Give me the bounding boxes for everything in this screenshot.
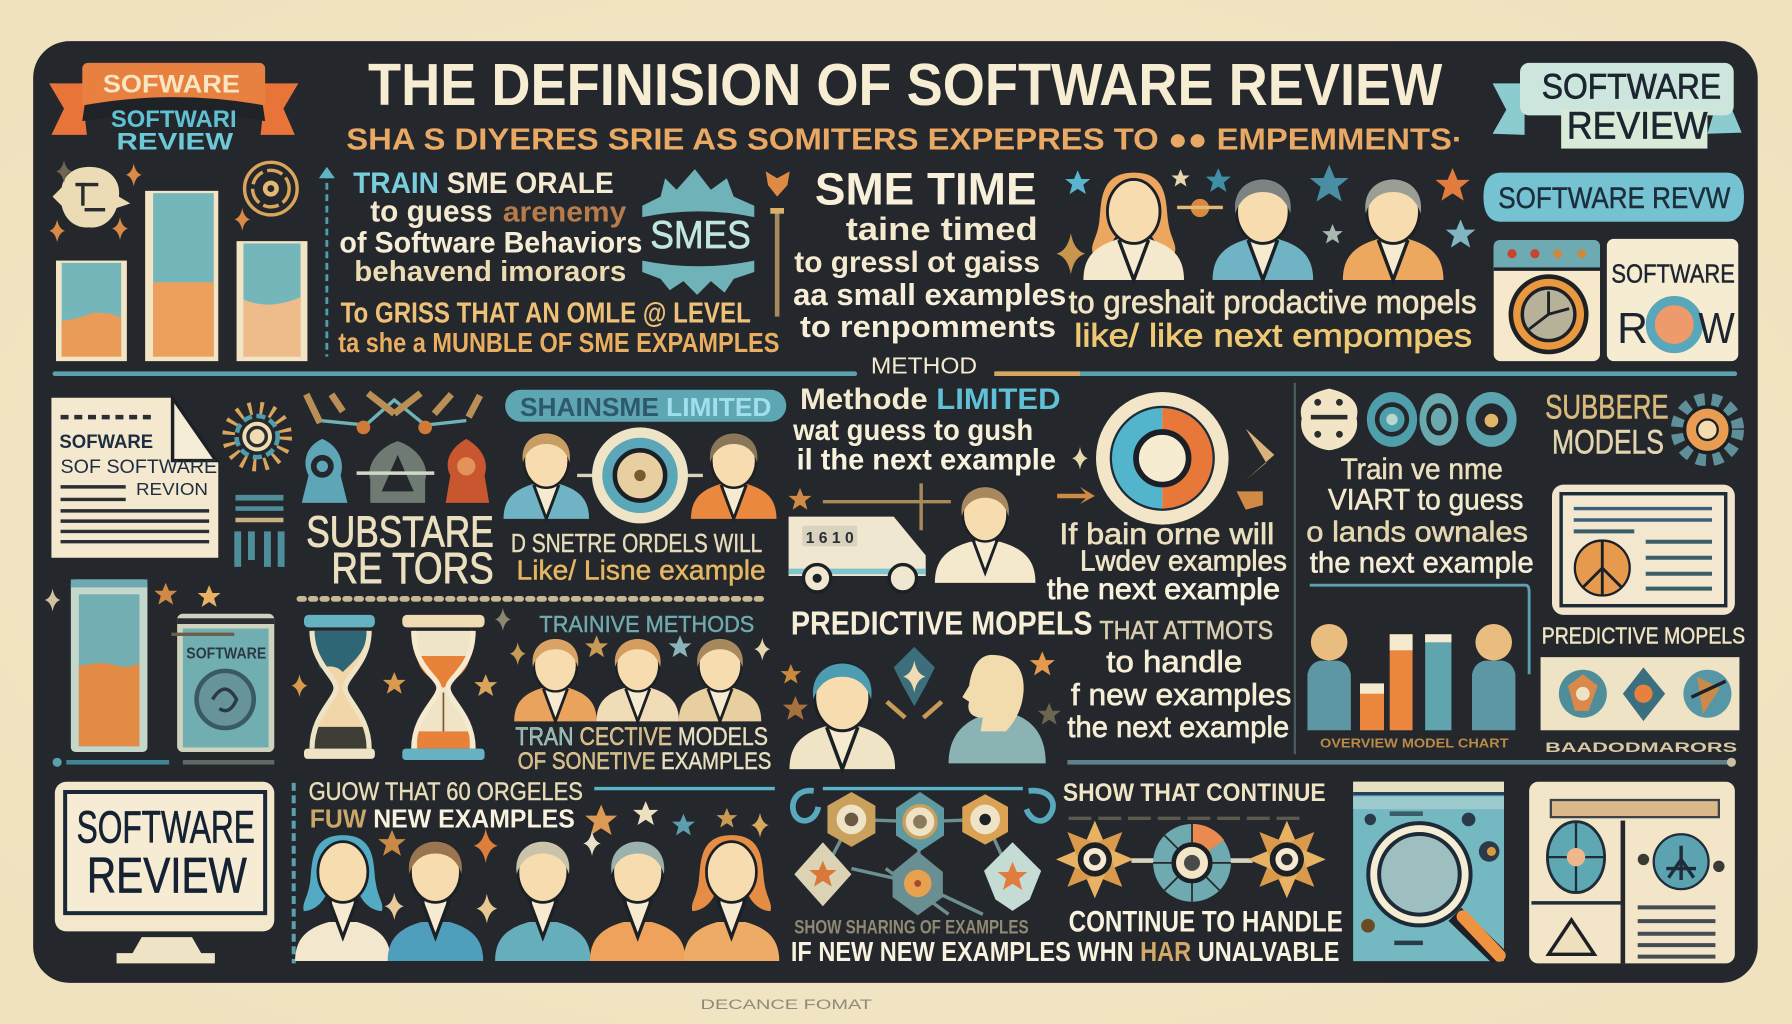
- text block: train sme: behavend imoraors: [354, 256, 626, 288]
- panel: monitor: [55, 782, 274, 963]
- panel: bar gauges: [49, 160, 307, 361]
- person 4: [590, 842, 685, 961]
- lines: [1638, 907, 1715, 957]
- text block: handle new examples: to handle: [1106, 644, 1242, 679]
- card: three emblems: [1541, 657, 1739, 730]
- people: three experts: [1056, 165, 1475, 280]
- badge: teal software review ribbon: [1493, 63, 1742, 149]
- heading: subbere models: SUBBERE: [1545, 388, 1669, 426]
- people: five team members: [295, 835, 779, 961]
- bar short: [1360, 683, 1384, 730]
- person 1: [514, 639, 597, 721]
- person: truck driver: [935, 487, 1035, 583]
- icon: smes gear badge: [642, 169, 754, 295]
- text block: if new examples: IF NEW NEW EXAMPLES WHN HAR UNALVABLE: [791, 936, 1339, 967]
- text block: sme time: aa small examples: [793, 277, 1066, 312]
- icon: tower: [235, 495, 283, 567]
- text block: sme time: taine timed: [846, 211, 1038, 247]
- bar tall teal: [1425, 634, 1451, 730]
- arrow: right chain: [1026, 791, 1053, 821]
- heading: substare retors: [306, 508, 494, 593]
- heading: trainive methods: TRAINIVE METHODS: [539, 611, 754, 637]
- text block: models will: D SNETRE ORDELS WILL: [511, 528, 762, 558]
- pill: software review: [1483, 173, 1744, 222]
- text block: train ve nme: VIART to guess: [1328, 484, 1523, 517]
- divider: method: [53, 353, 1737, 379]
- person right: [1472, 624, 1515, 730]
- icon: medals network: [302, 393, 489, 503]
- text block: train sme: of Software Behaviors: [339, 227, 642, 260]
- text block: predictive models top: [1069, 284, 1477, 353]
- text block: predictive models top: like/ like next empompes: [1074, 317, 1472, 353]
- node 1: [827, 792, 875, 847]
- icon: ring 2: [1419, 393, 1458, 446]
- text block: new examples: [309, 778, 583, 833]
- bar tall orange: [1390, 634, 1413, 730]
- footer credit: DECANCE FOMAT: [701, 997, 873, 1012]
- icon: software row card: R: [1617, 305, 1648, 353]
- node 6: [984, 842, 1041, 911]
- text block: will examples: [1047, 518, 1287, 606]
- person left: [504, 433, 589, 519]
- document text: [59, 417, 217, 542]
- badge: teal software review ribbon: REVIEW: [1567, 104, 1708, 146]
- text block: train sme: ta she a MUNBLE OF SME EXPAMPLES: [338, 327, 779, 358]
- text block: will examples: If bain orne will: [1059, 518, 1274, 551]
- icon: peace pie: [1575, 541, 1630, 595]
- caption: faded show line: SHOW SHARING OF EXAMPLES: [794, 917, 1029, 939]
- icon: central target: [577, 427, 703, 523]
- badge: orange software ribbon: SOFWARE: [103, 71, 240, 99]
- icon: window card: [1494, 240, 1600, 361]
- text block: train sme: arenemy: [503, 197, 626, 229]
- icon: magnifying glass: [1374, 829, 1499, 958]
- arrow: left chain: [793, 791, 818, 821]
- person left: [1307, 624, 1351, 730]
- icon: gold target: [245, 162, 297, 215]
- chart: donut: [1096, 392, 1229, 525]
- text block: train ve nme: Train ve nme: [1341, 453, 1503, 486]
- icon: folded corner: [173, 398, 216, 461]
- person 2: [388, 842, 483, 961]
- diagram: network of nodes: [793, 791, 1053, 915]
- icon: gold sun right: [1248, 821, 1326, 898]
- icon: ring 1: [1367, 392, 1417, 447]
- text block: trainive models: OF SONETIVE EXAMPLES: [518, 748, 771, 775]
- text block: methode limited: il the next example: [797, 444, 1056, 477]
- heading: substare retors: SUBSTARE: [306, 508, 494, 556]
- icon: software box: [177, 614, 274, 752]
- heading: substare retors: RE TORS: [331, 545, 494, 593]
- people: predictive pair: [781, 647, 1061, 769]
- rule: teal top line: [594, 787, 1023, 790]
- vertical rule: [1294, 383, 1296, 754]
- icon: badge: [53, 167, 130, 228]
- divider: method: METHOD: [871, 353, 977, 379]
- emblem 2: [1623, 667, 1665, 721]
- accents: small marks: [1361, 813, 1499, 943]
- text block: sme time: SME TIME: [815, 164, 1037, 215]
- text block: train sme: [338, 167, 779, 358]
- person 1: [1083, 173, 1184, 280]
- heading: predictive models: PREDICTIVE MOPELS: [791, 605, 1093, 642]
- person 2: [1213, 179, 1313, 280]
- icon: house: [1549, 920, 1594, 954]
- icon: ornament: [887, 647, 942, 718]
- icon: hourglass orange: [402, 615, 485, 760]
- monitor text: SOFTWARE: [77, 801, 255, 852]
- person 3: [495, 842, 591, 961]
- icon: flag pin: [766, 171, 790, 317]
- text block: will examples: the next example: [1047, 573, 1280, 606]
- text block: sme time: [793, 164, 1066, 344]
- document text: REVION: [136, 479, 208, 499]
- divider: lower: [53, 758, 1736, 767]
- badge: orange software ribbon: SOFTWARI: [111, 106, 237, 133]
- monitor screen: [65, 792, 265, 913]
- pill: software review: SOFTWARE REVW: [1498, 182, 1730, 215]
- heading: subbere models: [1545, 388, 1669, 462]
- icon: teal sun: [229, 408, 286, 465]
- node 2: [896, 792, 944, 851]
- text block: predictive models top: to greshait prodactive mopels: [1069, 284, 1477, 320]
- subtitle: SHA S DIYERES SRIE AS SOMITERS EXPEPRES TO ●● EMPEMMENTS·: [346, 122, 1463, 157]
- person 3: [1343, 179, 1443, 280]
- icon: software row card: [1607, 239, 1738, 361]
- icon: orange sun: [1678, 400, 1737, 459]
- node 3: [962, 794, 1008, 845]
- text block: train sme: TRAIN SME ORALE: [353, 167, 614, 200]
- node 4: [794, 842, 851, 906]
- text block: trainive models: TRAN CECTIVE MODELS: [515, 723, 768, 751]
- accents: stars row: [378, 801, 769, 923]
- accents: stars: [781, 651, 1061, 725]
- rule: dashed vertical: [292, 783, 295, 963]
- icon: software row card: SOFTWARE: [1611, 258, 1735, 288]
- text block: handle new examples: [1067, 615, 1291, 744]
- monitor text: [77, 801, 255, 904]
- emblem 1: [1559, 670, 1607, 718]
- accents: trainer stars: [510, 635, 770, 665]
- text block: train ve nme: o lands ownales: [1306, 517, 1528, 549]
- text block: train ve nme: [1306, 453, 1534, 580]
- accents: gold stars: [291, 608, 511, 697]
- icon: pie: [1547, 822, 1605, 893]
- person 5: [684, 835, 779, 961]
- text block: handle new examples: the next example: [1067, 711, 1289, 744]
- text block: show that continue: SHOW THAT CONTINUE: [1063, 779, 1326, 807]
- monitor text: REVIEW: [87, 847, 247, 904]
- text block: new examples: GUOW THAT 60 ORGELES: [309, 778, 583, 806]
- bracket line: [1310, 585, 1529, 674]
- title: THE DEFINISION OF SOFTWARE REVIEW: [368, 51, 1443, 118]
- person right: [691, 433, 776, 519]
- icon: document page: [51, 398, 218, 558]
- icon: gold sun left: [1056, 821, 1134, 898]
- text block: handle new examples: f new examples: [1071, 677, 1291, 712]
- icon: truck: [789, 517, 926, 592]
- header bar: [1551, 800, 1719, 817]
- arrow: vertical teal: [319, 167, 335, 357]
- accents: pointers: [789, 429, 1274, 530]
- text block: sme time: to renpomments: [800, 309, 1056, 344]
- icon: software row card: W: [1698, 305, 1735, 353]
- text block: models will: [511, 528, 766, 585]
- icon: jar: [71, 579, 147, 752]
- gauge bar 3: [237, 241, 307, 361]
- people: target pair: [504, 427, 776, 523]
- monitor stand: [117, 937, 215, 963]
- badge: orange software ribbon: [49, 63, 298, 156]
- card dividers: [1531, 901, 1621, 904]
- accents: small stars: [49, 160, 250, 242]
- panel: magnifier: [1353, 782, 1504, 961]
- icon: ring 3: [1466, 392, 1517, 447]
- text block: new examples: FUW NEW EXAMPLES: [310, 803, 575, 833]
- gauge bar 2: [145, 191, 218, 361]
- icon: hourglass teal: [304, 615, 375, 759]
- person 2: [596, 639, 679, 721]
- icon: smes gear badge: SMES: [650, 214, 751, 257]
- text block: models will: Like/ Lisne example: [517, 554, 766, 585]
- chart: people and bars: [1307, 585, 1529, 750]
- text block: methode limited: [792, 383, 1061, 477]
- text block: trainive models: [515, 723, 771, 775]
- text block: continue to handle: CONTINUE TO HANDLE: [1069, 905, 1343, 938]
- icon: monitor frame: [55, 782, 274, 931]
- text block: train ve nme: the next example: [1310, 547, 1534, 580]
- node links: [823, 819, 1011, 914]
- rule: faded: [1069, 817, 1303, 820]
- chart caption: OVERVIEW MODEL CHART: [1320, 736, 1509, 750]
- panel: summary card: [1529, 782, 1735, 963]
- panel: jar and box: [45, 579, 274, 752]
- text block: methode limited: wat guess to gush: [792, 414, 1033, 447]
- emblem 3: [1683, 670, 1731, 718]
- panel: document: [51, 398, 218, 558]
- people: trainers: [514, 639, 761, 721]
- document text: SOF SOFTWARE: [61, 456, 217, 478]
- text block: train sme: to guess: [370, 194, 493, 229]
- badge: teal software review ribbon: SOFTWARE: [1542, 66, 1721, 106]
- gauge bar 1: [56, 261, 127, 361]
- heading: predictive models small: PREDICTIVE MOPELS: [1542, 622, 1745, 648]
- badge: orange software ribbon: REVIEW: [117, 129, 234, 156]
- text block: will examples: Lwdev examples: [1080, 545, 1287, 577]
- icon: software box: SOFTWARE: [186, 645, 267, 662]
- document text: SOFWARE: [59, 431, 153, 453]
- icon: blob: [1301, 389, 1357, 450]
- person 3: [679, 639, 761, 721]
- person left: [789, 664, 895, 769]
- accents: stars: [1056, 165, 1475, 274]
- chart: segmented pie: [1131, 824, 1253, 902]
- icon: truck: 1 6 1 0: [806, 530, 854, 547]
- card: report with pie: [1552, 485, 1735, 615]
- text block: methode limited: Methode LIMITED: [800, 383, 1061, 416]
- text block: handle new examples: THAT ATTMOTS: [1099, 615, 1273, 645]
- person 1: [295, 835, 391, 961]
- accents: ornaments: [45, 583, 234, 634]
- icon: tree circle: [1638, 834, 1725, 889]
- caption: tiny text: BAADODMARORS: [1545, 740, 1737, 755]
- node 5: [893, 851, 943, 915]
- text block: train sme: To GRISS THAT AN OMLE @ LEVEL: [341, 297, 751, 329]
- heading: subbere models: MODELS: [1552, 424, 1664, 462]
- text block: sme time: to gressl ot gaiss: [794, 246, 1040, 279]
- pill: shainsme limited: SHAINSME LIMITED: [520, 392, 771, 422]
- dotted rule: [299, 596, 768, 601]
- person right profile: [949, 655, 1046, 763]
- panel: circles row: [1295, 383, 1517, 754]
